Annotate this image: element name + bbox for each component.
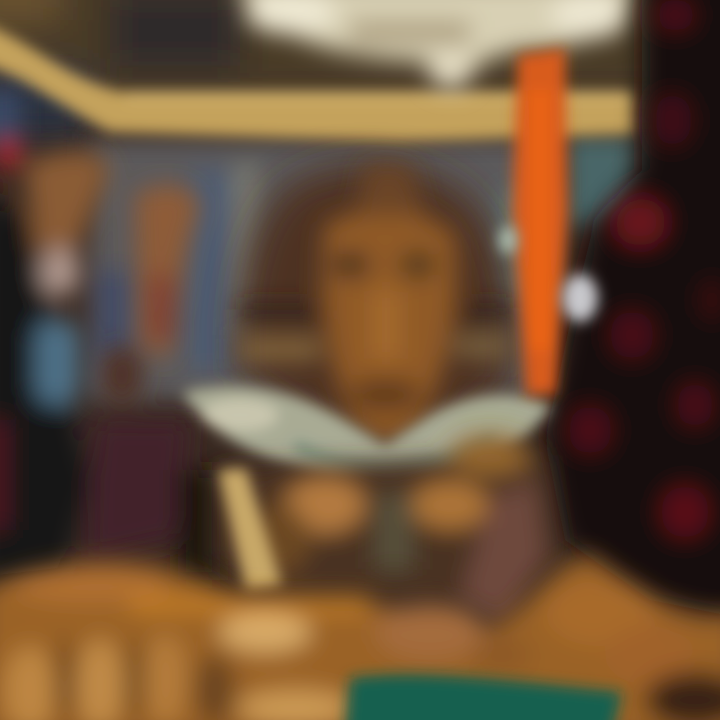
white glints [499,226,598,322]
pharaoh headdress and face [239,165,512,445]
dark red curtain [545,0,720,620]
pale column [218,468,282,590]
chandelier [235,0,635,92]
background: grey-blue colonnade [90,135,635,400]
lower torso and arms [215,435,560,625]
left crowd figures [0,90,220,585]
green table [345,675,622,720]
gold ceiling band [0,22,635,142]
background: ceiling [0,0,680,140]
pharaoh collar [182,386,552,480]
orange vertical banner [512,48,568,395]
golden foreground [0,555,720,720]
